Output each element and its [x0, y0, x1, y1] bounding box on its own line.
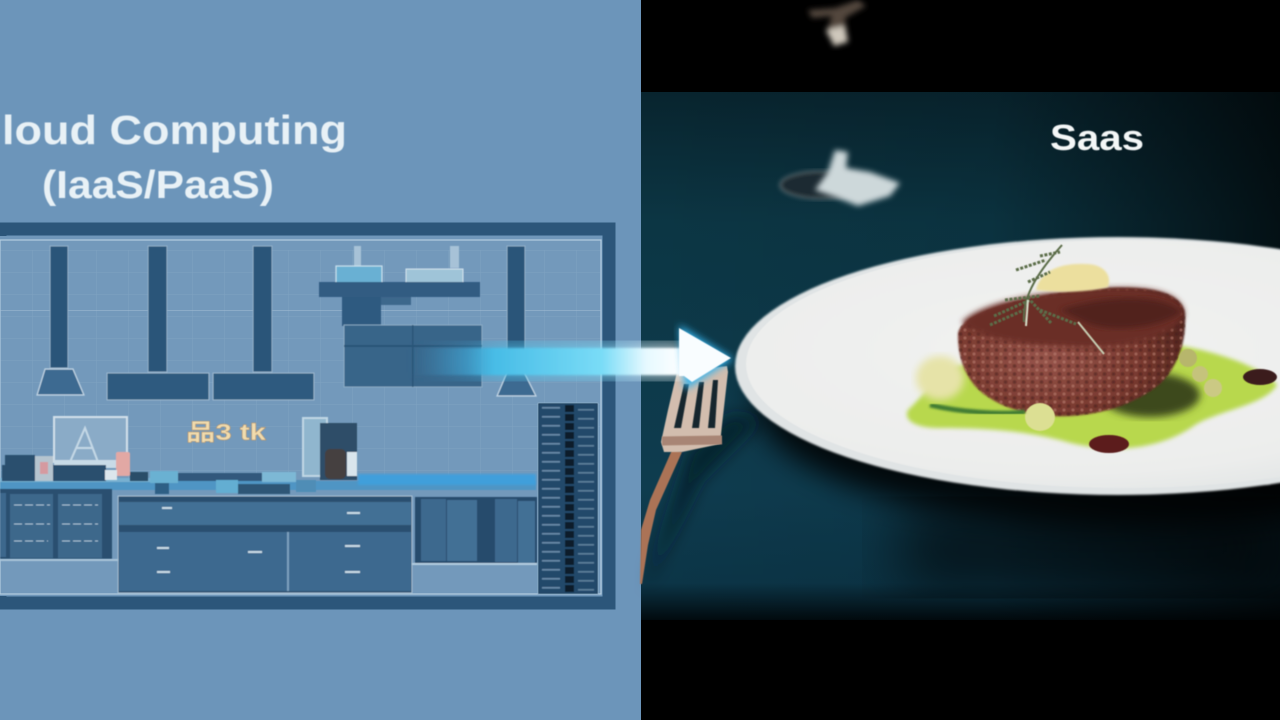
- kitchen worktop items: [2, 417, 148, 481]
- garbled kitchen label: 品3 tk: [186, 419, 266, 445]
- heading: cloud computing: [2, 107, 347, 207]
- blurred glass reflection: [780, 150, 900, 206]
- kitchen frame: [0, 229, 609, 603]
- cream sauce: [916, 356, 964, 400]
- kitchen counter: [0, 471, 536, 494]
- dark table: [641, 92, 1280, 620]
- steak shadow: [1100, 373, 1200, 417]
- fork tine gaps: [674, 380, 718, 428]
- fork neck band: [662, 435, 722, 445]
- sauce garnish: [930, 349, 1277, 453]
- oven appliance: [303, 418, 357, 480]
- plate: [735, 237, 1280, 495]
- heading line 2: (IaaS/PaaS): [42, 164, 274, 207]
- centre island cabinet: [118, 496, 412, 593]
- fork: [640, 366, 760, 590]
- heading line 1: loud Computing: [2, 107, 347, 153]
- steak: [958, 288, 1185, 416]
- panel: saas fine dining: [640, 0, 1280, 720]
- fork handle: [640, 450, 682, 584]
- base cabinets left: [0, 489, 112, 559]
- fork head: [661, 366, 728, 452]
- upper right appliance stack: [319, 246, 482, 387]
- blurred glass top: [808, 0, 866, 46]
- heading: saas: Saas: [1050, 117, 1144, 158]
- base cabinets right: [0, 497, 537, 565]
- fork shadow: [646, 415, 760, 590]
- green sauce: [907, 345, 1277, 448]
- arrow: iaas/paas to saas: [412, 325, 733, 390]
- panel: cloud computing kitchen blueprint: [0, 0, 641, 720]
- plate shadow: [755, 272, 1280, 528]
- herb sprig: [990, 245, 1104, 354]
- butter topping: [1036, 264, 1109, 292]
- kitchen upper equipment: [37, 246, 536, 400]
- server rack: [538, 403, 598, 594]
